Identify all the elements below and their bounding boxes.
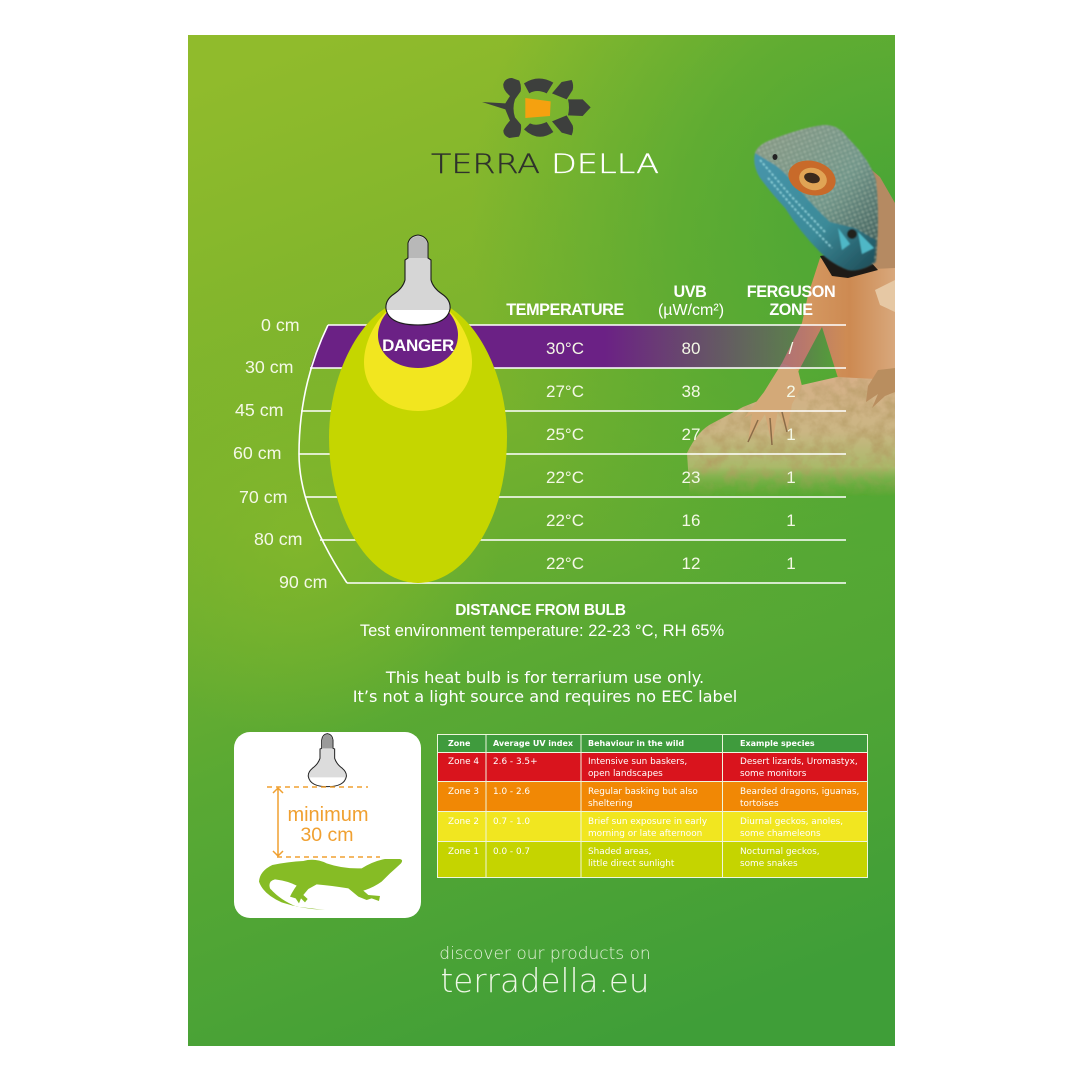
zone 1 text: Shaded areas, xyxy=(588,847,651,857)
distance labels: 90 cm xyxy=(279,572,327,592)
UVB values: 27 xyxy=(682,425,700,444)
table: Ferguson zones xyxy=(438,734,868,878)
temperature values: 27°C xyxy=(546,382,584,401)
temperature values: 30°C xyxy=(546,339,584,358)
zone 2 text: morning or late afternoon xyxy=(588,829,702,839)
distance labels: 60 cm xyxy=(233,443,281,463)
lizard jaw xyxy=(754,153,876,270)
table header text: Example species xyxy=(740,739,815,748)
column headers: ZONE xyxy=(769,301,813,319)
UVB values: 23 xyxy=(682,468,700,487)
footer: website call to action: terradella.eu xyxy=(441,962,649,1000)
temperature values: 22°C xyxy=(546,468,584,487)
table grid xyxy=(438,734,868,878)
temperature values: 22°C xyxy=(546,554,584,573)
caption: distance from bulb xyxy=(360,602,724,640)
lizard nostril xyxy=(772,154,778,160)
zone 3 text: Bearded dragons, iguanas, xyxy=(740,787,859,797)
Ferguson zone values xyxy=(786,339,796,573)
UVB values: 16 xyxy=(682,511,700,530)
zone 3 text: sheltering xyxy=(588,799,632,809)
distance labels: 80 cm xyxy=(254,529,302,549)
zone 4 text: Intensive sun baskers, xyxy=(588,757,687,767)
column headers: TEMPERATURE xyxy=(506,301,624,319)
panel: green background xyxy=(188,35,895,1046)
zone 4 text: open landscapes xyxy=(588,769,663,779)
temperature values xyxy=(546,339,584,573)
chart grid lines xyxy=(299,325,846,583)
icon: bulb xyxy=(386,235,450,325)
Ferguson zone values: 1 xyxy=(786,425,796,444)
zone 1 text: 0.0 - 0.7 xyxy=(493,847,530,857)
danger band xyxy=(310,325,846,368)
icon: small bulb xyxy=(308,734,346,787)
table header text: Behaviour in the wild xyxy=(588,739,684,748)
zone 2 text: some chameleons xyxy=(740,829,821,839)
distance labels xyxy=(233,315,327,592)
table header text xyxy=(448,739,815,748)
zone row: lime xyxy=(438,842,868,878)
column headers: UVB xyxy=(674,283,706,301)
Ferguson zone values: / xyxy=(789,339,794,358)
dashed distance lines xyxy=(267,787,380,857)
Ferguson zone values: 1 xyxy=(786,511,796,530)
distance labels: 70 cm xyxy=(239,487,287,507)
heat zone: yellow xyxy=(364,298,472,411)
zone row: orange xyxy=(438,782,868,812)
zone 1 text: little direct sunlight xyxy=(588,859,675,869)
rock xyxy=(687,377,895,500)
zone 3 text xyxy=(448,787,859,809)
zone 2 text xyxy=(448,817,843,839)
icon: turtle xyxy=(482,78,591,138)
temperature values: 25°C xyxy=(546,425,584,444)
lizard mouth scales xyxy=(838,228,874,254)
zone 3 text: Zone 3 xyxy=(448,787,479,797)
lizard chest scales xyxy=(875,280,895,312)
Ferguson zone values: 2 xyxy=(786,382,796,401)
zone row: red xyxy=(438,752,868,782)
zone row: yellow xyxy=(438,812,868,842)
zone 2 text: Brief sun exposure in early xyxy=(588,817,707,827)
lizard body xyxy=(782,258,895,384)
zone 1 text: some snakes xyxy=(740,859,798,869)
caption: distance from bulb: Test environment temperature: 22-23 °C, RH 65% xyxy=(360,622,724,640)
column headers xyxy=(506,283,835,319)
zone 4 text: some monitors xyxy=(740,769,807,779)
lizard head xyxy=(754,125,878,270)
logo wordmark: DELLA xyxy=(551,149,659,180)
distance labels: 30 cm xyxy=(245,357,293,377)
Ferguson zone values: 1 xyxy=(786,468,796,487)
lizard throat shadow xyxy=(820,255,878,278)
danger label: DANGER xyxy=(382,336,454,355)
logo wordmark: TERRA xyxy=(431,149,540,180)
footer: website call to action: discover our products on xyxy=(439,944,651,964)
footer: website call to action xyxy=(439,944,651,1000)
zone 4 text xyxy=(448,757,858,779)
logo: Terra Della xyxy=(431,78,659,180)
zone 4 text: 2.6 - 3.5+ xyxy=(493,757,538,767)
Ferguson zone values: 1 xyxy=(786,554,796,573)
heat zone: danger xyxy=(378,298,458,368)
zone 1 text: Nocturnal geckos, xyxy=(740,847,820,857)
column headers: FERGUSON xyxy=(747,283,835,301)
temperature values: 22°C xyxy=(546,511,584,530)
text: terrarium use notice: This heat bulb is for terrarium use only. xyxy=(385,668,704,687)
UVB values xyxy=(682,339,700,573)
zone 1 text xyxy=(448,847,820,869)
zone 3 text: 1.0 - 2.6 xyxy=(493,787,530,797)
lizard neck xyxy=(870,169,895,269)
table header text: Zone xyxy=(448,739,471,748)
zone 2 text: 0.7 - 1.0 xyxy=(493,817,530,827)
chart: distance from bulb xyxy=(233,235,846,592)
zone 1 text: Zone 1 xyxy=(448,847,479,857)
icon: lizard silhouette xyxy=(259,859,402,910)
text: terrarium use notice: It’s not a light source and requires no EEC label xyxy=(353,687,737,706)
table header text: Average UV index xyxy=(493,739,574,748)
panel: minimum distance card: 30 cm xyxy=(300,824,354,846)
panel: minimum distance card xyxy=(234,732,421,918)
zone row: header xyxy=(438,734,868,752)
zone 4 text: Zone 4 xyxy=(448,757,479,767)
distance labels: 0 cm xyxy=(261,315,300,335)
UVB values: 12 xyxy=(682,554,700,573)
photo: bearded dragon on a rock xyxy=(687,125,895,500)
arrow: 30 cm span xyxy=(273,788,283,856)
zone 3 text: tortoises xyxy=(740,799,779,809)
minimum label: minimum xyxy=(287,804,369,826)
lizard forefoot xyxy=(744,363,802,445)
text: terrarium use notice xyxy=(353,668,737,706)
zone 3 text: Regular basking but also xyxy=(588,787,698,797)
zone 4 text: Desert lizards, Uromastyx, xyxy=(740,757,858,767)
zone 2 text: Diurnal geckos, anoles, xyxy=(740,817,843,827)
zone 2 text: Zone 2 xyxy=(448,817,479,827)
caption: distance from bulb: DISTANCE FROM BULB xyxy=(455,602,626,619)
UVB values: 38 xyxy=(682,382,700,401)
heat zone: lime xyxy=(329,298,507,583)
lizard rear foot xyxy=(866,368,895,408)
column headers: (µW/cm²) xyxy=(658,302,724,319)
distance labels: 45 cm xyxy=(235,400,283,420)
UVB values: 80 xyxy=(682,339,700,358)
lizard eye xyxy=(788,160,836,196)
